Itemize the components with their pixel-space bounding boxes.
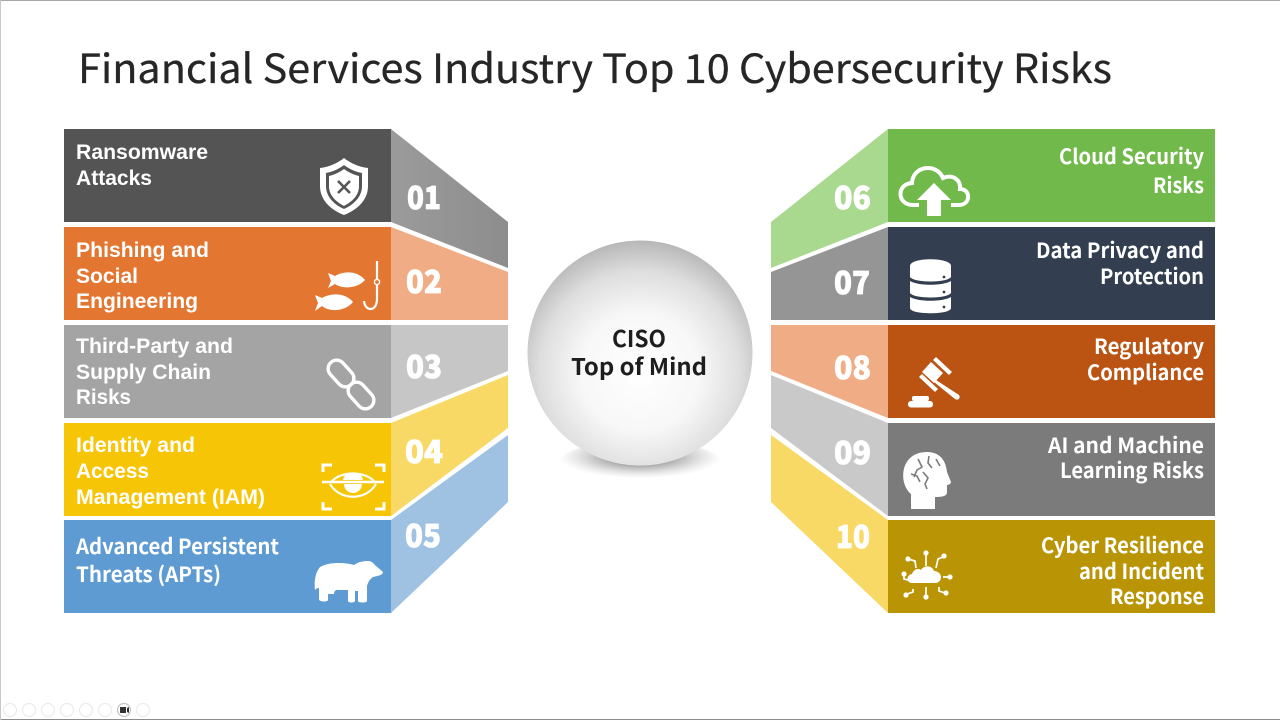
panel: 04 identity and access management: Identity and — [76, 434, 195, 457]
icon: fish and hook — [315, 261, 380, 311]
title: Financial Services Industry Top 10 Cybersecurity Risks — [78, 37, 1112, 95]
panel: 06 cloud security risks: Risks — [1153, 170, 1204, 200]
panel: 02 phishing and social engineering: Phishing and — [76, 239, 209, 262]
panel: 10 cyber resilience and incident response — [771, 435, 1215, 613]
icon: chain links — [325, 357, 377, 412]
icon: cloud upload — [900, 168, 968, 216]
panel: 05 advanced persistent threats: Advanced Persistent — [75, 531, 279, 561]
panel: 03 third-party and supply chain risks: Risks — [76, 386, 131, 409]
panel: 07 data privacy and protection — [771, 227, 1215, 320]
panel: 09 ai and machine learning risks: AI and Machine — [1047, 430, 1204, 460]
central sphere: ciso top of mind — [528, 240, 752, 485]
panel: 08 regulatory compliance: Regulatory — [1094, 331, 1204, 361]
central sphere: ciso top of mind: CISO — [612, 320, 666, 354]
panel: 07 data privacy and protection: Data Privacy and — [1036, 235, 1204, 265]
panel: 09 ai and machine learning risks: Learning Risks — [1060, 455, 1204, 485]
panel: 08 regulatory compliance: Compliance — [1087, 357, 1204, 387]
icon: database — [910, 259, 951, 313]
icon: bear — [315, 561, 383, 602]
panel: 01 ransomware attacks: Attacks — [76, 167, 152, 190]
panel: 03 third-party and supply chain risks — [64, 325, 508, 418]
panel: 03 third-party and supply chain risks: 03 — [406, 342, 442, 388]
icon: cloud network — [901, 550, 953, 600]
panel: 06 cloud security risks: Cloud Security — [1059, 141, 1204, 171]
icon: gavel — [908, 357, 960, 408]
panel: 03 third-party and supply chain risks: Third-Party and — [76, 335, 233, 358]
panel: 01 ransomware attacks: 01 — [407, 173, 441, 219]
icon: shield with x — [320, 158, 368, 215]
panel: 05 advanced persistent threats — [64, 435, 508, 613]
panel: 04 identity and access management: Access — [76, 460, 149, 483]
panel: 05 advanced persistent threats: Threats (APTs) — [76, 559, 221, 589]
panel: 04 identity and access management: Management (IAM) — [76, 486, 265, 509]
panel: 10 cyber resilience and incident response: 10 — [836, 512, 870, 558]
panel: 09 ai and machine learning risks — [771, 375, 1215, 516]
panel: 08 regulatory compliance: 08 — [834, 343, 871, 389]
panel: 09 ai and machine learning risks: 09 — [834, 428, 871, 474]
panel: 05 advanced persistent threats: 05 — [405, 511, 441, 557]
panel: 02 phishing and social engineering: Social — [76, 265, 138, 288]
panel: 10 cyber resilience and incident response: Response — [1110, 581, 1204, 611]
panel: 07 data privacy and protection: 07 — [834, 258, 870, 304]
panel: 02 phishing and social engineering — [64, 227, 508, 320]
panel: 01 ransomware attacks — [64, 129, 508, 268]
icon: ai head — [903, 452, 951, 509]
panel: 01 ransomware attacks: Ransomware — [76, 141, 208, 164]
panel: 04 identity and access management: 04 — [405, 427, 443, 473]
panel: 04 identity and access management — [64, 375, 508, 516]
central sphere: ciso top of mind: Top of Mind — [571, 348, 707, 382]
panel: 10 cyber resilience and incident response: and Incident — [1079, 556, 1204, 586]
panel: 02 phishing and social engineering: 02 — [406, 257, 442, 303]
panel: 06 cloud security risks — [771, 129, 1215, 268]
icon: eye scan — [322, 465, 384, 509]
panel: 10 cyber resilience and incident response: Cyber Resilience — [1041, 530, 1204, 560]
panel: 08 regulatory compliance — [771, 325, 1215, 418]
panel: 02 phishing and social engineering: Engineering — [76, 290, 198, 313]
panel: 03 third-party and supply chain risks: Supply Chain — [76, 361, 211, 384]
panel: 07 data privacy and protection: Protection — [1100, 261, 1204, 291]
panel: 06 cloud security risks: 06 — [834, 173, 871, 219]
presentation toolbar — [4, 704, 150, 716]
